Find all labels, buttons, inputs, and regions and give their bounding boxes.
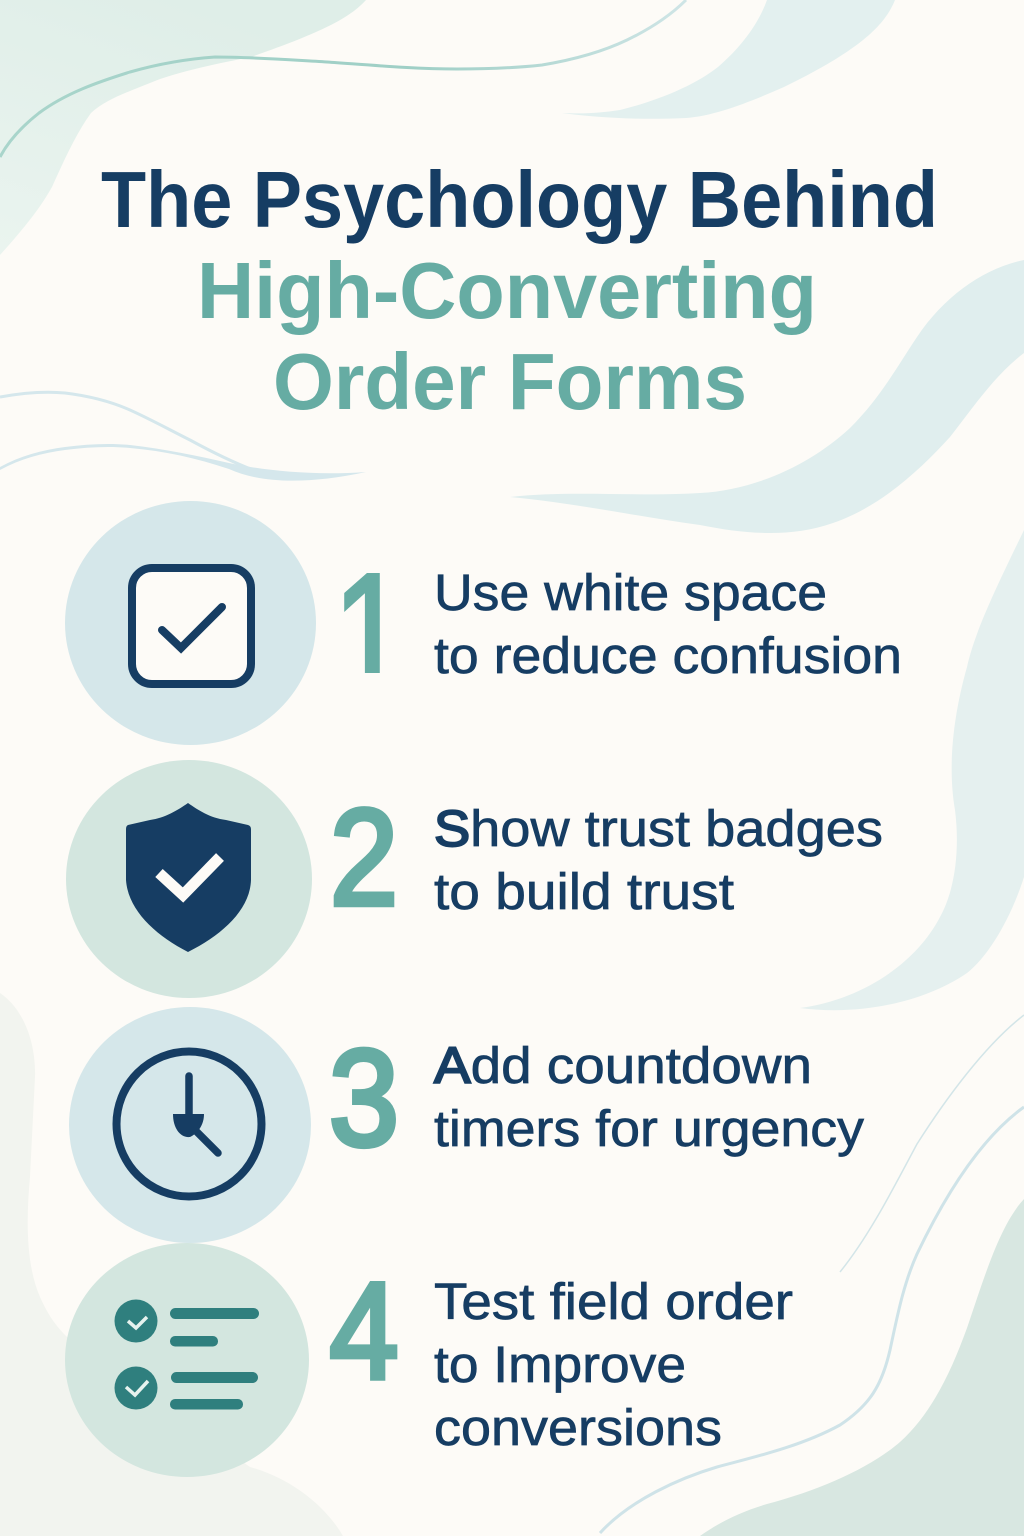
icon: checkbox: [132, 568, 251, 684]
text: show trust badges: Show trust badges: [434, 800, 883, 857]
panel: step 2 trust badges: [66, 760, 883, 998]
icon: clock: [116, 1052, 262, 1196]
title: [101, 155, 938, 426]
text: show trust badges: to build trust: [434, 863, 734, 920]
text: add countdown timers: [434, 1037, 865, 1157]
text: test field order: to Improve: [434, 1336, 686, 1393]
text: add countdown timers: timers for urgency: [434, 1100, 865, 1157]
text: use white space: [434, 564, 902, 684]
text: show trust badges: [434, 800, 883, 920]
icon: checklist: [114, 1300, 259, 1410]
icon: shield: [126, 803, 251, 952]
number 4: 4: [330, 1255, 398, 1408]
number 3: 3: [329, 1022, 399, 1175]
text: test field order: [434, 1273, 793, 1456]
text: add countdown timers: Add countdown: [434, 1037, 812, 1094]
title: Order Forms: [273, 337, 747, 426]
panel: step 4 test field order: [65, 1243, 793, 1477]
title: The Psychology Behind: [101, 155, 938, 244]
title: High-Converting: [197, 246, 817, 335]
text: use white space: to reduce confusion: [434, 627, 902, 684]
text: test field order: conversions: [434, 1399, 722, 1456]
panel: step 3 countdown timers: [69, 1007, 865, 1243]
panel: step 1 white space: [65, 501, 902, 745]
number 1: 1: [333, 539, 407, 729]
text: test field order: Test field order: [434, 1273, 793, 1330]
text: use white space: Use white space: [434, 564, 827, 621]
number 2: 2: [330, 782, 398, 934]
